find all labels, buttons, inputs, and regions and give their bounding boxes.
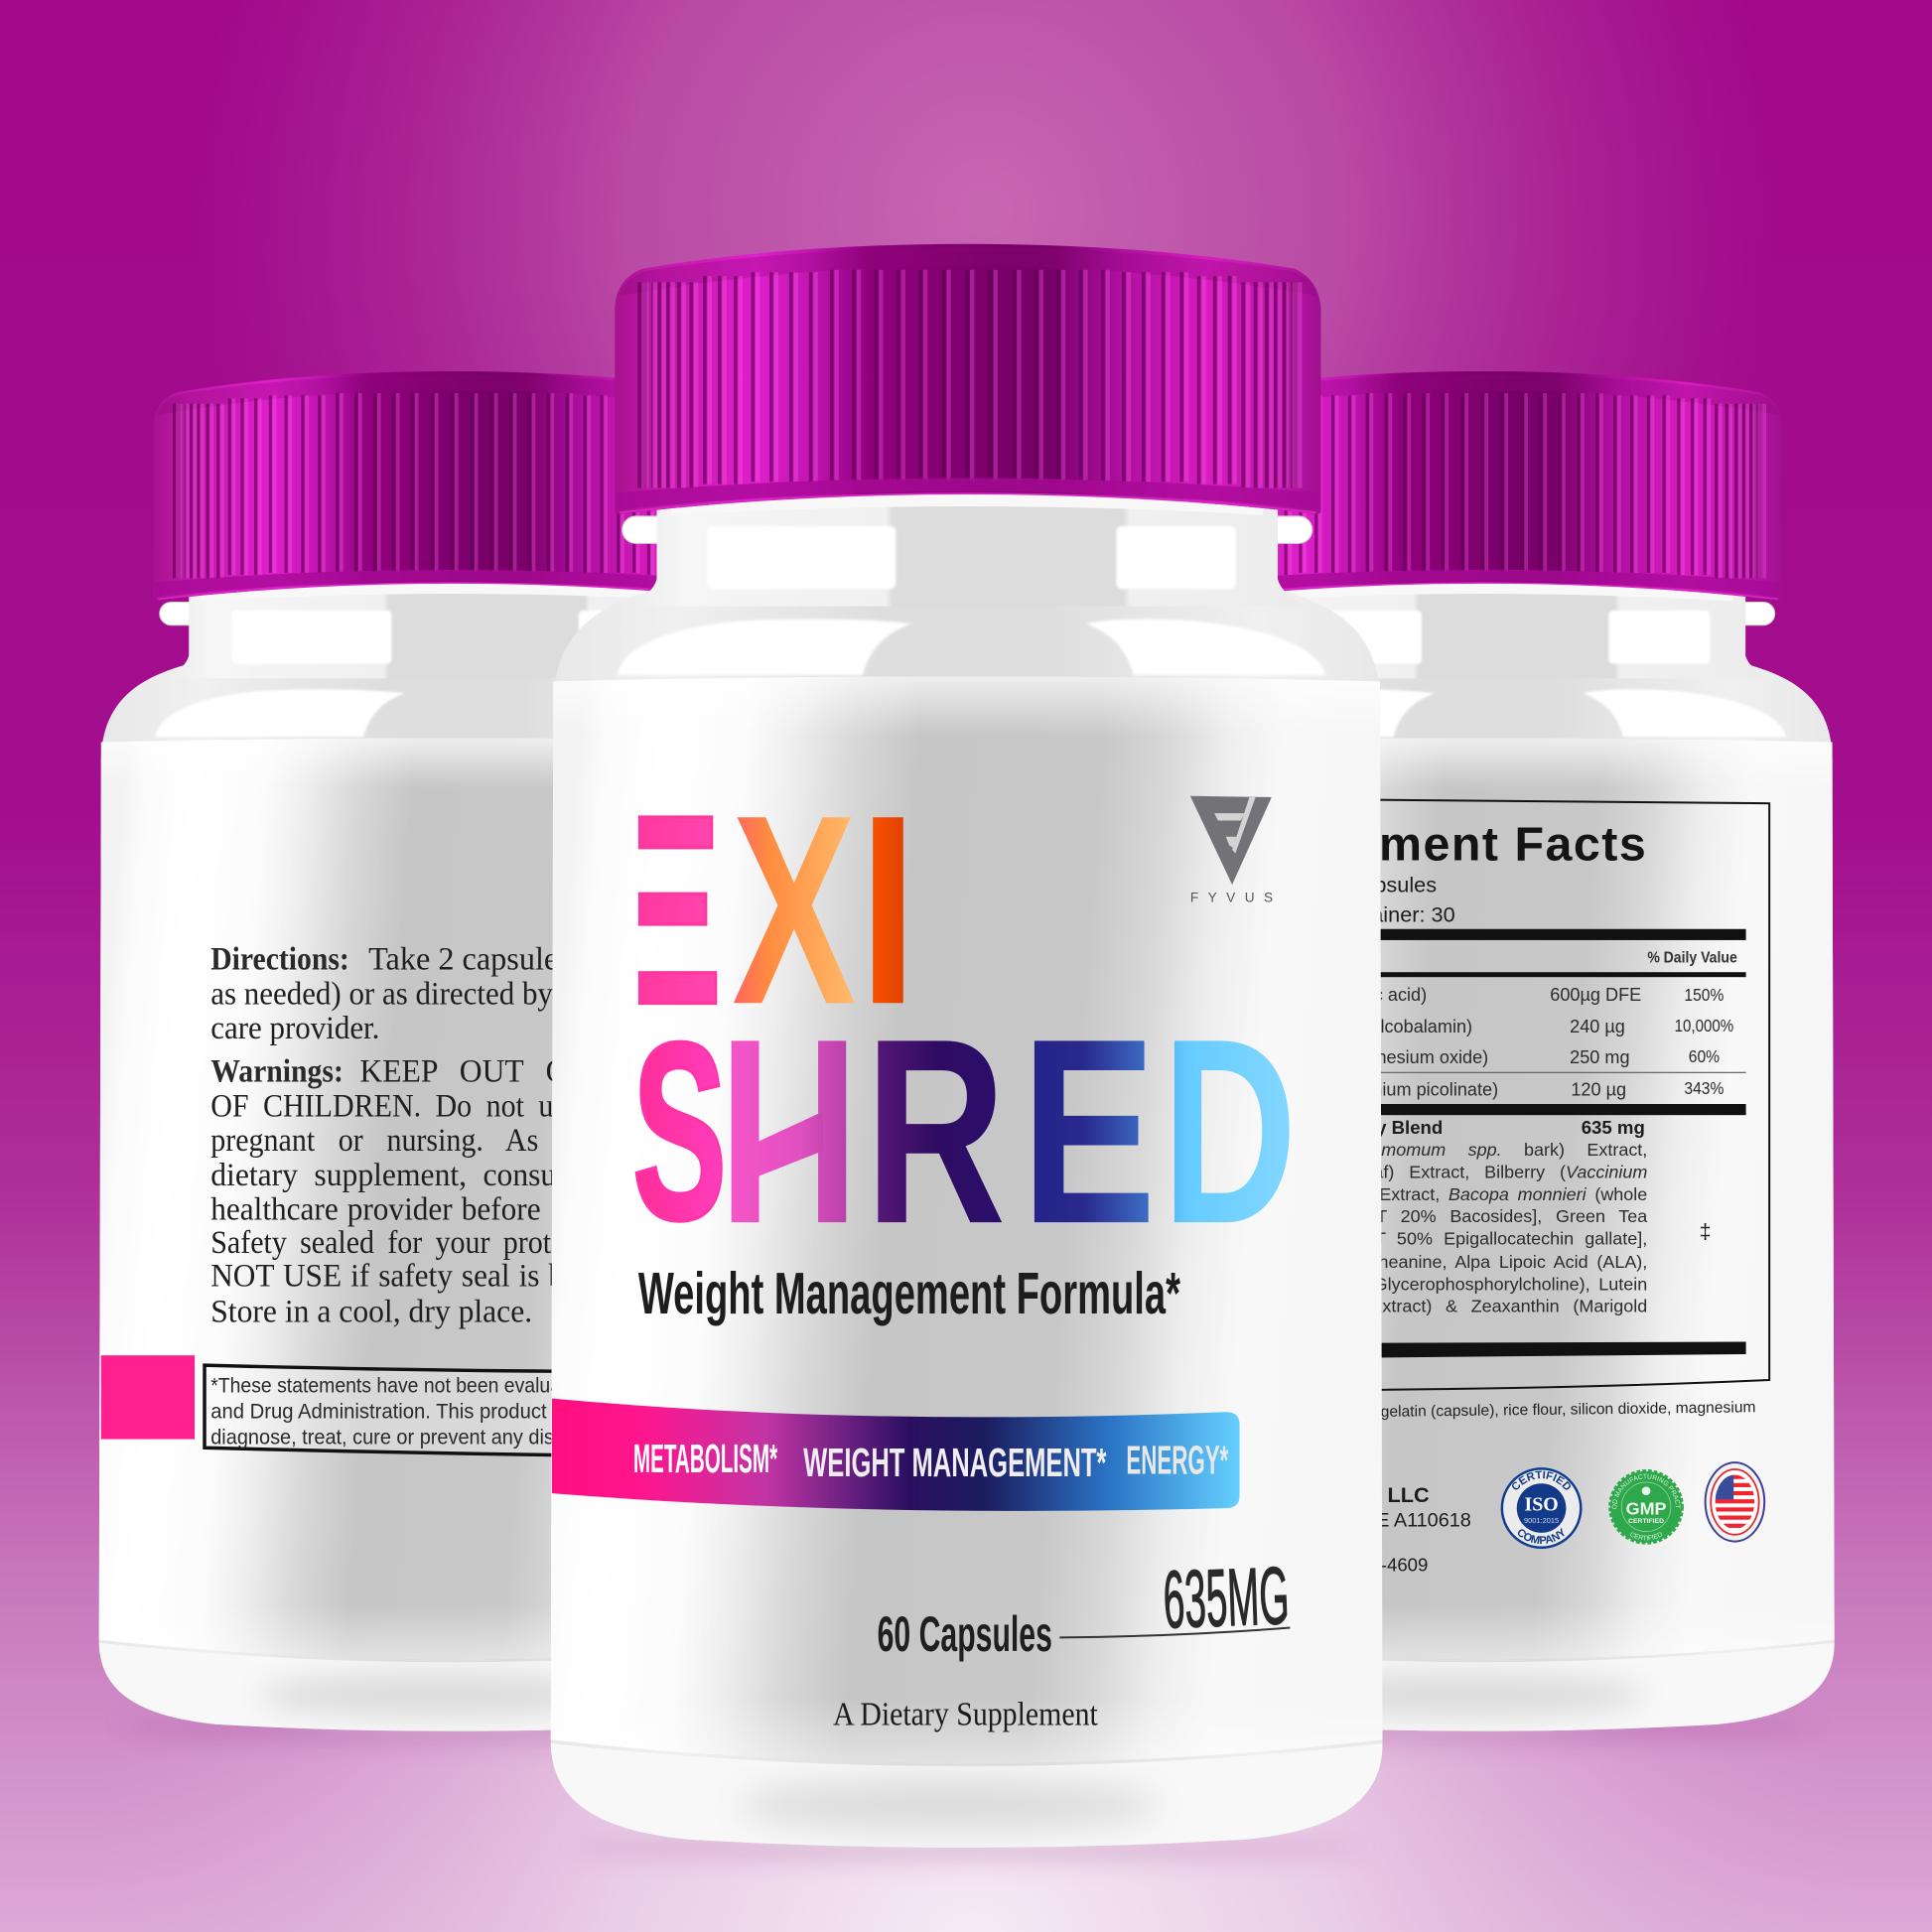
gmp certified badge: CERTIFIED (1630, 1533, 1662, 1541)
directions text: care provider. (210, 1011, 379, 1045)
nutrient rows: 343% (1684, 1078, 1725, 1098)
right bottle: supplement facts side (1278, 371, 1835, 1735)
proprietary blend heading: Proprietary Blend (1288, 1117, 1443, 1138)
warnings text (210, 1053, 634, 1329)
proprietary blend ingredients: [NLT 50% Epigallocatechin gallate], (1348, 1228, 1647, 1248)
gmp certified badge: GMP (1626, 1498, 1667, 1518)
facts title: Supplement Facts (1210, 817, 1647, 871)
usa flag badge (1706, 1462, 1764, 1542)
proprietary blend heading (1288, 1117, 1645, 1138)
warnings text: NOT USE if safety seal is broken (210, 1258, 634, 1294)
supplement facts panel (1196, 799, 1769, 1575)
nutrient rows: 10,000% (1675, 1017, 1733, 1035)
capsule count: 60 Capsules (878, 1606, 1052, 1662)
nutrient rows: 240 µg (1570, 1017, 1625, 1036)
dosage rule (1059, 1627, 1290, 1637)
banner text (633, 1436, 1228, 1485)
right bottle blank (1129, 371, 1835, 1731)
center bottle blank (551, 244, 1382, 1848)
proprietary blend ingredients: Alpha-Glycerophosphorylcholine), Lutein (1322, 1274, 1647, 1294)
warnings text: KEEP OUT OF (359, 1053, 586, 1089)
proprietary blend ingredients: (leaf) Extract, Bilberry (Vaccinium (1353, 1162, 1647, 1181)
panel frame (1355, 799, 1769, 1390)
dietary supplement line: A Dietary Supplement (833, 1696, 1098, 1732)
warnings text: pregnant or nursing. As (210, 1122, 538, 1158)
iso certified badge: CERTIFIED (1512, 1471, 1571, 1489)
directions text: as needed) or as directed by (210, 976, 553, 1012)
directions text: Take 2 capsules (368, 941, 571, 977)
proprietary blend ingredients (1225, 1140, 1647, 1316)
nutrient rows: Chromium (as chromium picolinate) (1214, 1079, 1498, 1099)
iso certified badge: 9001:2015 (1524, 1516, 1559, 1525)
manufacturer details: CAGE A110618 (1333, 1510, 1471, 1532)
nutrient rows: Folate (folic acid) (1290, 985, 1427, 1005)
product name bottom line SHRED: D (1162, 983, 1298, 1279)
brand logo: Fyvus: FYVUS (1190, 890, 1283, 904)
banner text: ENERGY* (1126, 1437, 1228, 1482)
iso certified badge: ISO (1524, 1494, 1559, 1516)
serving info (1196, 873, 1455, 926)
daily value heading: % Daily Value (1647, 948, 1737, 967)
FDA disclaimer box: and Drug Administration. This product is (210, 1400, 567, 1424)
nutrient rows: Magnesium (as magnesium oxide) (1213, 1047, 1488, 1067)
facts rules (1355, 929, 1746, 1358)
FDA disclaimer box: *These statements have not been evaluated (210, 1375, 588, 1398)
product name top line EXI (637, 815, 903, 1005)
banner text: WEIGHT MANAGEMENT* (803, 1440, 1107, 1485)
product name top line EXI: X (732, 760, 856, 1060)
nutrient rows: 60% (1689, 1046, 1720, 1066)
product name bottom line SHRED: E (1021, 984, 1157, 1279)
banner text: METABOLISM* (633, 1436, 777, 1481)
manufacturer details: FYVUS LLC (1310, 1482, 1430, 1507)
proprietary blend ingredients: fruit) Extract, Bacopa monnieri (whole (1335, 1184, 1647, 1204)
double dagger note: ‡ (1700, 1220, 1712, 1243)
warnings text: OF CHILDREN. Do not use (210, 1087, 578, 1124)
left bottle blank (99, 371, 804, 1731)
floor shadows (119, 1716, 1815, 1861)
proprietary blend ingredients: [NLT 20% Bacosides], Green Tea (1350, 1206, 1647, 1226)
FDA disclaimer box: diagnose, treat, cure or prevent any disease (210, 1426, 597, 1449)
warnings text: Warnings: (210, 1053, 344, 1089)
other ingredients: Other Ingredients: gelatin (capsule), rice flour, silicon dioxide, magnesium (1252, 1399, 1756, 1422)
proprietary blend ingredients: L-Theanine, Alpa Lipoic Acid (ALA), (1351, 1252, 1647, 1272)
serving info: Serving Size: 2 Capsules (1196, 873, 1437, 897)
left label accent bar (101, 1355, 195, 1440)
product name top line EXI: E (592, 760, 724, 1060)
gmp certified badge (1608, 1469, 1684, 1545)
iso certified badge: COMPANY (1517, 1527, 1565, 1545)
nutrient rows (1200, 985, 1733, 1099)
proprietary blend ingredients: Extract) & Zeaxanthin (Marigold (1370, 1297, 1647, 1316)
directions text (210, 941, 571, 1045)
serving info: Servings Per Container: 30 (1196, 901, 1455, 926)
warnings text: healthcare provider before (210, 1191, 541, 1227)
warnings text: Store in a cool, dry place. (210, 1294, 532, 1329)
subtitle: Weight Management Formula* (638, 1260, 1180, 1326)
product name bottom line SHRED (635, 1040, 1290, 1223)
warnings text: dietary supplement, consult (210, 1158, 574, 1192)
manufacturer details (1310, 1482, 1471, 1575)
brand logo: Fyvus (1190, 796, 1283, 904)
nutrient rows: 120 µg (1571, 1079, 1626, 1099)
product name bottom line SHRED: S (632, 990, 727, 1273)
iso certified badge (1501, 1467, 1583, 1549)
benefits banner (552, 1399, 1240, 1511)
center bottle: front label (551, 244, 1382, 1848)
directions text: Directions: (210, 941, 349, 977)
left bottle: directions and warnings side (99, 371, 804, 1731)
nutrient rows: 600µg DFE (1550, 985, 1641, 1005)
center bottle: front label: 635MG (1162, 1551, 1291, 1645)
nutrient rows: 150% (1684, 985, 1725, 1005)
proprietary blend heading: 635 mg (1582, 1117, 1645, 1138)
FDA disclaimer box (205, 1365, 597, 1455)
manufacturer details: 555-4609 (1350, 1554, 1428, 1575)
gmp certified badge: GOOD MANUFACTURING PRACTICE (1612, 1473, 1681, 1509)
proprietary blend ingredients: Cinnamon (Cinnamomum spp. bark) Extract, (1225, 1140, 1647, 1160)
product name bottom line SHRED: R (865, 984, 1006, 1279)
product name top line EXI: I (859, 759, 917, 1060)
nutrient rows: 250 mg (1570, 1047, 1630, 1067)
warnings text: Safety sealed for your protection (210, 1224, 624, 1260)
product name bottom line SHRED: H (719, 984, 859, 1279)
gmp certified badge: CERTIFIED (1628, 1518, 1664, 1525)
nutrient rows: Vitamin B12 (as methylcobalamin) (1200, 1017, 1472, 1036)
